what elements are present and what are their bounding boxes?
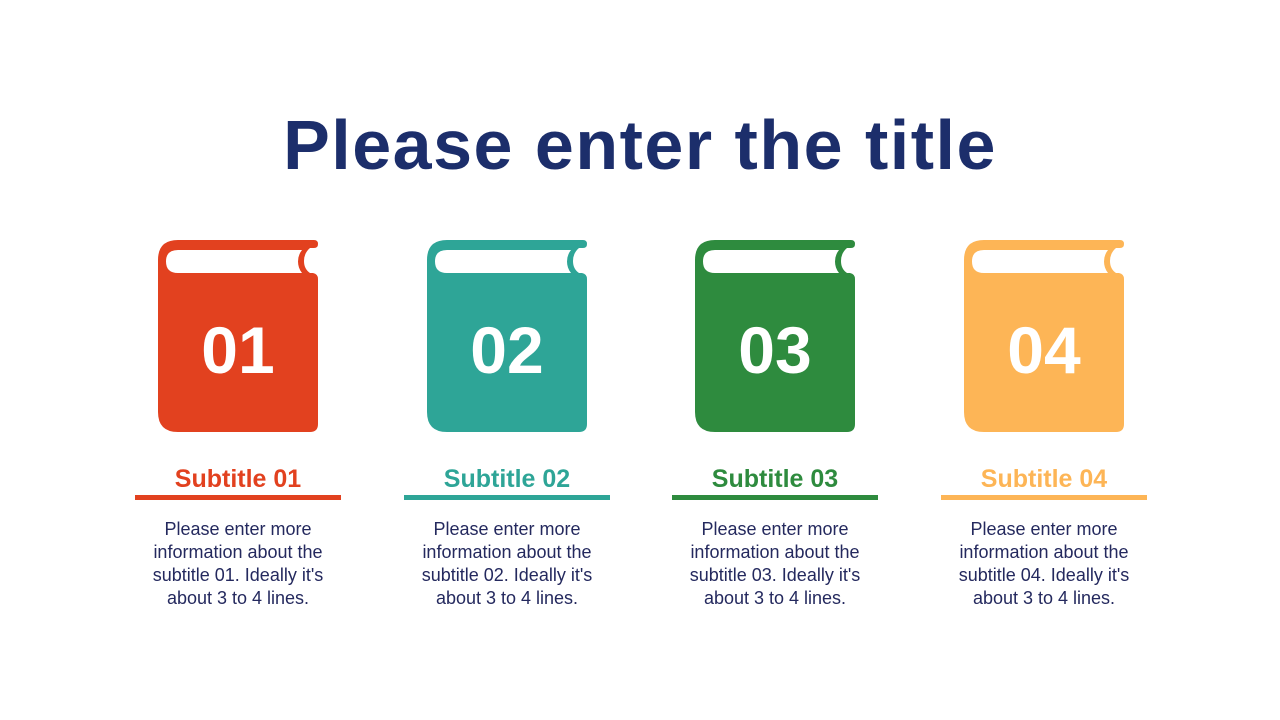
subtitle 03: Subtitle 03	[712, 465, 838, 493]
icon: book 04	[964, 240, 1124, 432]
subtitle 02: Subtitle 02	[444, 465, 570, 493]
panel: item 03	[672, 240, 878, 608]
panel: item 04	[941, 240, 1147, 608]
icon: book 02	[427, 240, 587, 432]
title: Please enter the title	[283, 106, 997, 184]
subtitle 01: Subtitle 01	[175, 465, 301, 493]
icon: book 01: 01	[201, 313, 275, 387]
icon: book 04: 04	[1007, 313, 1081, 387]
subtitle 04: Subtitle 04	[981, 465, 1107, 493]
icon: book 01	[158, 240, 318, 432]
icon: book 03: 03	[738, 313, 812, 387]
icon: book 02: 02	[470, 313, 544, 387]
text 03: Please enter more information about the subtitle 03. Ideally it's about 3 to 4 lines.	[690, 519, 860, 608]
text 01: Please enter more information about the subtitle 01. Ideally it's about 3 to 4 lines.	[153, 519, 323, 608]
icon: book 03	[695, 240, 855, 432]
panel: item 02	[404, 240, 610, 608]
text 04: Please enter more information about the subtitle 04. Ideally it's about 3 to 4 lines.	[959, 519, 1129, 608]
text 02: Please enter more information about the subtitle 02. Ideally it's about 3 to 4 lines.	[422, 519, 592, 608]
panel: item 01	[135, 240, 341, 608]
